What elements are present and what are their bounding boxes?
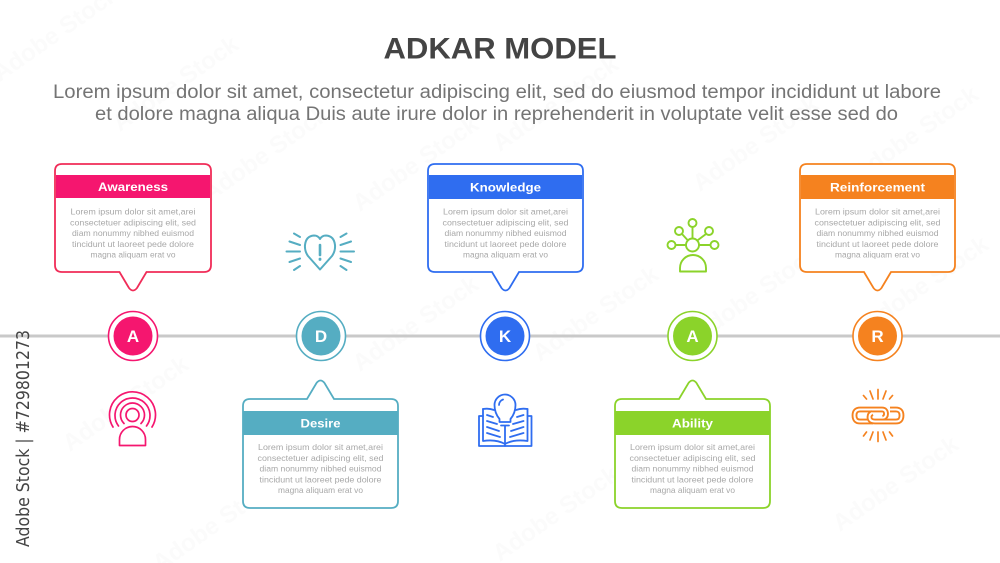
text: Adobe Stock — [688, 240, 824, 347]
Awareness body text: Lorem ipsum dolor sit amet,arei — [70, 206, 196, 216]
Reinforcement body text: magna aliquam erat vo — [835, 250, 920, 260]
text: Adobe Stock — [198, 100, 334, 207]
panel: Knowledge — [428, 164, 583, 290]
Ability header band — [615, 411, 770, 435]
panel: Ability — [615, 380, 770, 508]
Desire body text — [258, 442, 384, 495]
Awareness body text: magna aliquam erat vo — [90, 250, 176, 260]
Desire callout outline — [243, 380, 398, 508]
text: Adobe Stock — [348, 270, 484, 377]
Knowledge body text: tincidunt ut laoreet pede dolore — [444, 239, 567, 249]
text: Adobe Stock — [528, 260, 664, 367]
subtitle text block — [53, 82, 941, 125]
subtitle text block: Lorem ipsum dolor sit amet, consectetur adipiscing elit, sed do eiusmod tempor incididunt ut labore — [53, 82, 941, 103]
timeline node D: D — [315, 327, 327, 346]
Knowledge body text: magna aliquam erat vo — [463, 250, 548, 260]
text: Adobe Stock — [858, 230, 994, 337]
Ability callout outline — [615, 380, 770, 508]
Knowledge body text: diam nonummy nibhed euismod — [444, 228, 567, 238]
Knowledge body text — [442, 206, 569, 260]
Desire body text: Lorem ipsum dolor sit amet,arei — [258, 442, 383, 452]
Ability body text: diam nonummy nibhed euismod — [632, 464, 754, 474]
Awareness header band — [56, 175, 210, 198]
panel: Awareness — [55, 164, 211, 290]
Reinforcement body text: diam nonummy nibhed euismod — [816, 228, 939, 238]
Reinforcement header band — [801, 175, 954, 199]
Ability body text: Lorem ipsum dolor sit amet,arei — [630, 442, 755, 452]
Reinforcement body text: Lorem ipsum dolor sit amet,arei — [815, 206, 940, 216]
Desire body text: magna aliquam erat vo — [278, 485, 363, 495]
text: Adobe Stock — [688, 90, 824, 197]
Ability body text: consectetuer adipiscing elit, sed — [630, 453, 756, 463]
timeline node A — [108, 312, 158, 360]
Reinforcement body text: tincidunt ut laoreet pede dolore — [816, 239, 939, 249]
timeline line — [0, 334, 1000, 338]
Knowledge body text: Lorem ipsum dolor sit amet,arei — [443, 206, 568, 216]
Desire heading: Desire — [300, 418, 340, 430]
Reinforcement callout outline — [800, 164, 955, 290]
Ability heading: Ability — [672, 418, 714, 430]
icon: broadcasting person — [110, 392, 156, 446]
subtitle text block: et dolore magna aliqua Duis aute irure dolor in reprehenderit in voluptate velit esse sed do — [95, 104, 898, 125]
timeline node A: A — [127, 327, 139, 346]
stock credit text: Adobe Stock | #729801273 — [13, 330, 34, 547]
icon: heart with alert rays — [286, 234, 354, 270]
Ability body text: tincidunt ut laoreet pede dolore — [632, 474, 754, 484]
Desire body text: consectetuer adipiscing elit, sed — [258, 453, 384, 463]
Knowledge heading: Knowledge — [470, 182, 541, 194]
title: ADKAR MODEL — [384, 32, 616, 66]
timeline node K: K — [499, 327, 512, 346]
Knowledge header band — [429, 175, 582, 199]
Awareness heading: Awareness — [98, 182, 168, 194]
text: Adobe Stock — [848, 80, 984, 187]
panel: Desire — [243, 380, 398, 508]
icon: open book with light bulb — [479, 395, 532, 446]
Desire body text: tincidunt ut laoreet pede dolore — [260, 474, 382, 484]
text: Adobe Stock — [108, 30, 244, 137]
icon: chain link with sparks — [854, 390, 902, 442]
Awareness body text — [70, 206, 196, 260]
icon: person with connected nodes — [668, 219, 718, 272]
Awareness body text: tincidunt ut laoreet pede dolore — [72, 239, 194, 249]
Awareness body text: consectetuer adipiscing elit, sed — [70, 217, 196, 227]
timeline node D — [296, 312, 346, 360]
Ability body text — [630, 442, 756, 495]
timeline node K — [480, 312, 530, 360]
Reinforcement heading: Reinforcement — [830, 182, 925, 194]
Knowledge callout outline — [428, 164, 583, 290]
panel: Reinforcement — [800, 164, 955, 290]
timeline node R — [853, 312, 902, 360]
timeline node A — [668, 312, 717, 360]
text: Adobe Stock — [488, 50, 624, 157]
text: Adobe Stock — [348, 110, 484, 217]
Reinforcement body text — [814, 206, 941, 260]
timeline node A: A — [686, 327, 699, 346]
Ability body text: magna aliquam erat vo — [650, 485, 735, 495]
Awareness callout outline — [55, 164, 211, 290]
text: Adobe Stock — [828, 430, 964, 537]
timeline node R: R — [871, 327, 884, 346]
Knowledge body text: consectetuer adipiscing elit, sed — [442, 217, 569, 227]
Reinforcement body text: consectetuer adipiscing elit, sed — [814, 217, 941, 227]
text: Adobe Stock — [58, 350, 194, 457]
Desire header band — [243, 411, 398, 435]
Awareness body text: diam nonummy nibhed euismod — [72, 228, 194, 238]
Desire body text: diam nonummy nibhed euismod — [260, 464, 382, 474]
